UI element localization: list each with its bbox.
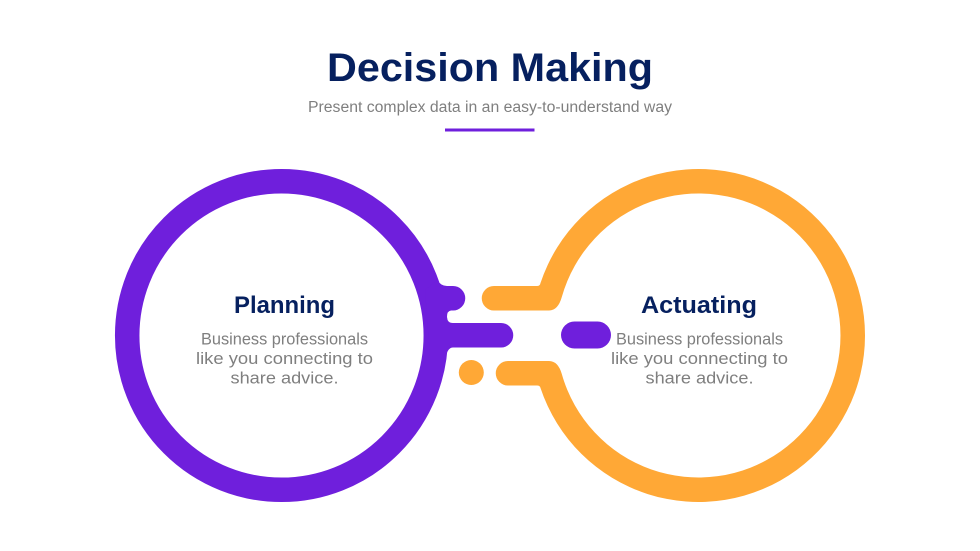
body: planning: like you connecting to (196, 350, 373, 368)
text block: planning (196, 292, 373, 388)
panel: planning ring (127, 181, 513, 490)
body: actuating: Business professionals (616, 330, 783, 348)
heading: planning: Planning (234, 292, 335, 319)
subtitle: Present complex data in an easy-to-understand way (308, 99, 672, 116)
pill: purple (561, 322, 611, 348)
body: actuating (611, 330, 788, 388)
text block: actuating (611, 292, 788, 388)
dot: orange circle (459, 360, 484, 385)
title: Decision Making (327, 46, 653, 90)
connector: purple tabs (425, 280, 513, 356)
body: actuating: share advice. (646, 370, 754, 388)
body: actuating: like you connecting to (611, 350, 788, 368)
title underline (445, 128, 534, 132)
heading: actuating: Actuating (641, 292, 757, 319)
body: planning (196, 330, 373, 388)
body: planning: Business professionals (201, 330, 368, 348)
body: planning: share advice. (230, 370, 338, 388)
panel: actuating open ring with tabs (482, 169, 865, 502)
